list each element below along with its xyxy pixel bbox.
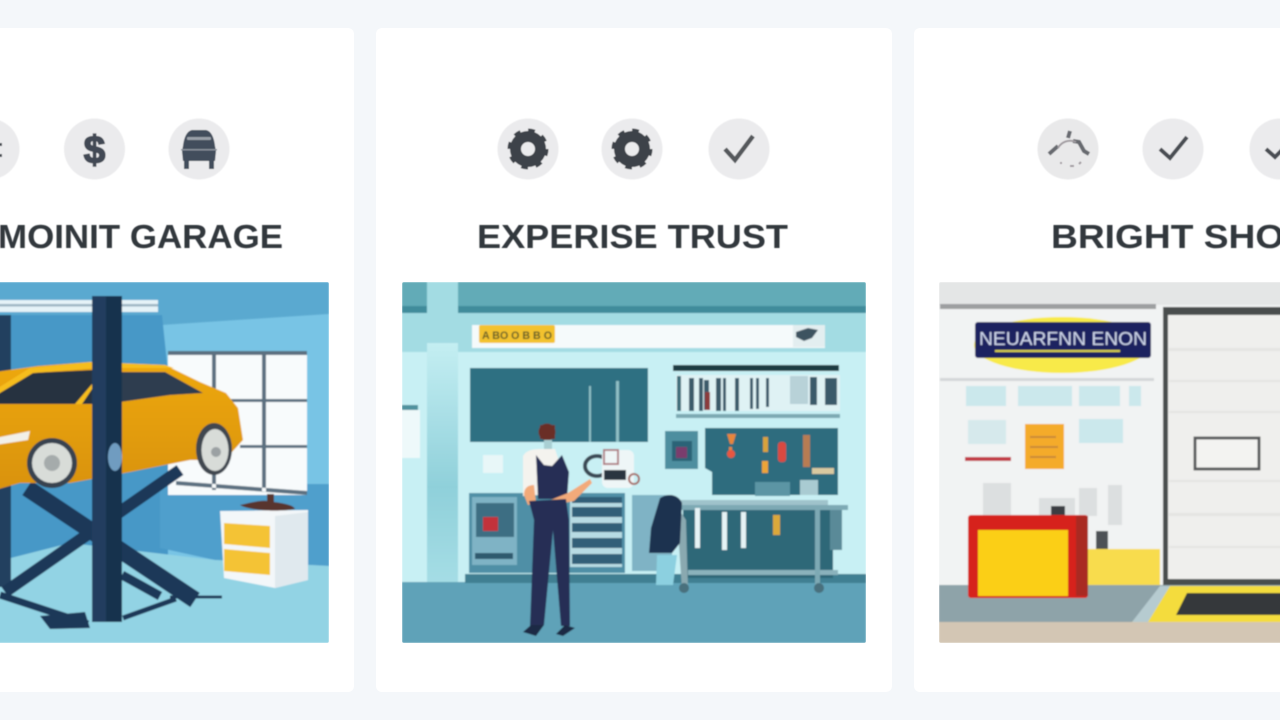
icon row (0, 118, 230, 180)
shop wall (939, 282, 1280, 592)
window (168, 351, 307, 495)
icon row (498, 118, 770, 180)
orange notice (1025, 424, 1064, 469)
icon: dollar sign: $ (84, 129, 106, 172)
icon: clipped badge (0, 118, 20, 180)
engine part on counter (585, 450, 639, 488)
illustration: car on lift (0, 282, 329, 643)
top sign strip: A BO O B B O (482, 330, 552, 342)
chalkboard (470, 368, 648, 442)
illustration: workshop with technician (402, 282, 866, 643)
panel: Moinit Garage (0, 28, 354, 692)
floor (0, 543, 329, 643)
wall (402, 282, 866, 587)
bucket (656, 555, 677, 585)
floor (939, 585, 1280, 643)
card background (914, 28, 1280, 692)
door window (1195, 438, 1259, 469)
icon row (1038, 118, 1280, 180)
ceiling light bar (0, 300, 158, 312)
dark mat (1176, 593, 1280, 615)
shop sign: NEUARFNN ENON (979, 329, 1147, 349)
hanging jacket (649, 495, 682, 553)
equipment on counter (983, 483, 1122, 549)
shop windows (966, 386, 1141, 444)
workbench (670, 500, 848, 593)
wall control box (665, 431, 698, 469)
tool shelf (673, 365, 840, 418)
lift base (40, 612, 90, 629)
technician (523, 424, 592, 636)
icon: scattered marks (1038, 118, 1098, 180)
card background (0, 28, 354, 692)
illustration: bright shop front (939, 282, 1280, 643)
floor (402, 574, 866, 643)
front lift post (92, 296, 122, 622)
card background (376, 28, 892, 692)
small wall outlet (483, 455, 503, 473)
car wheels (27, 438, 77, 488)
panel: Bright Shop (914, 28, 1280, 692)
panel: Experise Trust (376, 28, 892, 692)
heading: MOINIT GARAGE (0, 218, 283, 255)
red wall stripe (965, 457, 1011, 461)
icon: gear (498, 118, 558, 180)
icon: car front (168, 118, 230, 180)
icon: check mark (1142, 118, 1204, 180)
garage door (1163, 307, 1280, 585)
car (0, 362, 243, 490)
scissor lift (0, 470, 222, 624)
tool cabinet (220, 494, 308, 588)
icon: check mark clipped (1250, 118, 1280, 180)
top sign strip (472, 325, 825, 348)
heading: EXPERISE TRUST (477, 218, 788, 255)
icon: gear (602, 118, 662, 180)
heading: BRIGHT SHOP (1051, 218, 1280, 255)
pegboard (705, 428, 838, 496)
back wall (0, 282, 329, 567)
lower cabinets (469, 493, 672, 573)
icon: check mark (708, 118, 770, 180)
red counter (968, 515, 1088, 598)
yellow lower wall (1088, 549, 1160, 586)
icon: dollar sign (64, 118, 125, 180)
rear lift post (0, 315, 11, 587)
shop sign (974, 317, 1151, 373)
